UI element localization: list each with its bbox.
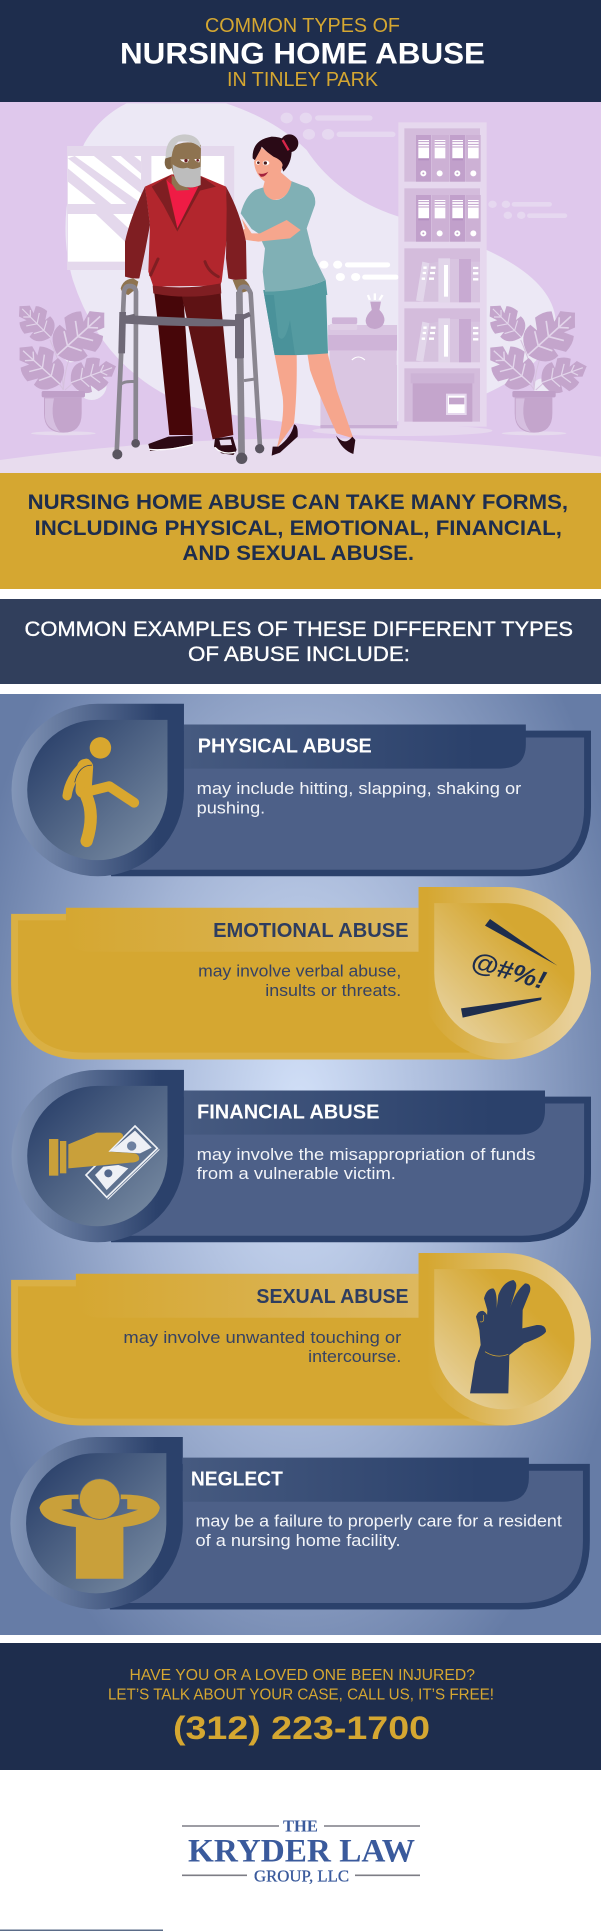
icon: censored swearing symbols [461,919,557,1018]
gold intro band: INCLUDING PHYSICAL, EMOTIONAL, FINANCIAL, [34,517,562,540]
card: emotional abuse: insults or threats. [265,982,401,1000]
icon: hand taking money [49,1126,159,1199]
title: nursing home abuse: NURSING HOME ABUSE [120,37,485,70]
card: physical abuse: PHYSICAL ABUSE [198,735,372,757]
card: neglect: of a nursing home facility. [195,1532,401,1550]
card: financial abuse [11,1070,591,1242]
card: emotional abuse: may involve verbal abuse, [198,963,401,981]
card: physical abuse: pushing. [197,799,265,817]
card: physical abuse: may include hitting, slapping, shaking or [197,780,522,798]
card: sexual abuse: may involve unwanted touching or [123,1329,402,1347]
card: sexual abuse [11,1253,591,1425]
card: financial abuse: from a vulnerable victim. [197,1165,396,1183]
card: emotional abuse: EMOTIONAL ABUSE [213,920,409,942]
card: neglect: NEGLECT [191,1469,283,1491]
navy subheading band: OF ABUSE INCLUDE: [188,643,410,666]
nurse [237,134,355,456]
call to action footer: LET’S TALK ABOUT YOUR CASE, CALL US, IT’S FREE! [108,1686,494,1703]
elderly man [121,134,251,455]
walker [112,286,264,464]
header banner [0,0,601,102]
icon: censored swearing symbols: @#%! [468,947,549,995]
logo: the kryder law group [182,1817,420,1886]
icon: kicking figure [67,737,134,841]
icon: person with hands behind head [39,1478,160,1579]
bookshelf [398,122,487,427]
logo: the kryder law group: GROUP, LLC [254,1867,349,1886]
title line: common types of: COMMON TYPES OF [205,14,400,37]
panel: types of abuse [0,694,601,1635]
potted plant right [477,295,593,435]
card: neglect: may be a failure to properly care for a resident [195,1513,562,1531]
call to action footer: HAVE YOU OR A LOVED ONE BEEN INJURED? [130,1667,475,1684]
gold intro band: NURSING HOME ABUSE CAN TAKE MANY FORMS, [28,491,568,514]
card: financial abuse: FINANCIAL ABUSE [197,1101,379,1123]
call to action footer [0,1643,601,1770]
room backdrop [0,102,601,473]
gold intro band: AND SEXUAL ABUSE. [182,542,414,565]
illustration: caregiver helping elderly man in a care home [0,102,601,473]
cabinet with books and vase [320,293,397,428]
card: sexual abuse: SEXUAL ABUSE [256,1286,409,1308]
card: financial abuse: may involve the misappropriation of funds [197,1146,535,1164]
logo: the kryder law group: KRYDER LAW [188,1834,415,1870]
card: emotional abuse [11,887,591,1059]
card: neglect [10,1437,590,1609]
navy subheading band: COMMON EXAMPLES OF THESE DIFFERENT TYPES [24,618,573,641]
navy subheading band [0,599,601,684]
card: sexual abuse: intercourse. [308,1348,401,1366]
title line: in tinley park: IN TINLEY PARK [227,68,378,91]
logo: the kryder law group: THE [283,1817,318,1836]
icon: reaching hand [470,1280,546,1393]
card: physical abuse [11,704,591,876]
potted plant left [6,295,122,435]
bottom edge rule [0,1930,163,1931]
gold intro band [0,473,601,589]
phone number: (312) 223-1700 [173,1710,430,1746]
